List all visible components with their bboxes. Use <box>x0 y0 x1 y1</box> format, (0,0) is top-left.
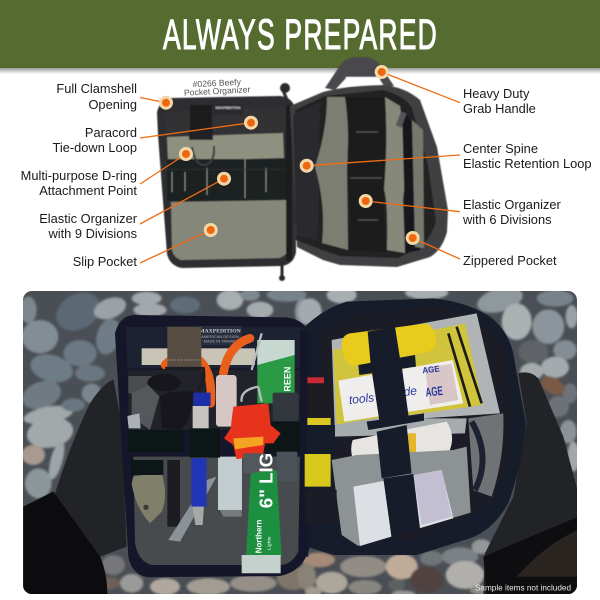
right panel of pouch <box>290 85 448 267</box>
foil lower edge <box>333 418 467 437</box>
left side of pouch with gear <box>115 315 310 577</box>
maxpedition label: MAXPEDITION <box>216 106 241 110</box>
right label: center spine: Center Spine <box>463 141 538 156</box>
elastic straps <box>358 327 424 538</box>
top green label text: REEN <box>283 367 293 392</box>
white bandage box <box>338 360 463 422</box>
right label: grab handle: Grab Handle <box>463 101 536 116</box>
right glove and sleeve <box>483 372 578 597</box>
flap seam <box>293 332 313 547</box>
zippered pocket mesh <box>412 120 424 248</box>
pliers <box>167 460 217 542</box>
elastic organizer band <box>167 159 288 201</box>
flashlight <box>243 393 299 481</box>
paracord knots <box>279 83 290 281</box>
rocks background <box>18 283 579 597</box>
left label: elastic organizer 9: with 9 Divisions <box>47 226 137 241</box>
center spine with spray <box>300 330 337 557</box>
left panel of pouch <box>157 96 296 268</box>
left mesh, dark <box>293 102 320 240</box>
black sheath <box>160 391 193 430</box>
side seam <box>286 105 292 261</box>
left glove and sleeve <box>23 379 127 597</box>
pouch body <box>300 298 526 555</box>
green glow stick packet: Northern <box>255 519 264 553</box>
white bandage box: AGE <box>425 384 444 400</box>
zipper <box>402 112 420 253</box>
model number caption: Pocket Organizer <box>184 84 251 98</box>
white bandage box: tools <box>348 390 375 407</box>
left label: full clamshell opening: Full Clamshell <box>56 81 137 96</box>
blue screwdriver pen <box>191 393 211 525</box>
green packet <box>257 340 295 403</box>
left label: paracord tie-down loop: Tie-down Loop <box>52 140 137 155</box>
left label: multi-purpose d-ring: Multi-purpose D-ring <box>21 168 137 183</box>
product photo: open pouch <box>157 57 448 281</box>
filled pouch photo <box>18 283 579 597</box>
right label: center spine: Elastic Retention Loop <box>463 156 592 171</box>
foil packet <box>332 313 500 437</box>
paracord bundle <box>147 374 181 391</box>
green glow stick packet <box>242 453 282 573</box>
upper khaki panel <box>167 133 284 161</box>
center spine elastic <box>345 97 386 252</box>
green glow stick packet: 6" LIG <box>256 453 277 508</box>
right label: elastic organizer 6: Elastic Organizer <box>463 197 562 212</box>
strap with D-ring <box>189 105 214 165</box>
knife <box>132 385 165 523</box>
left label: slip pocket: Slip Pocket <box>73 254 137 269</box>
whistle <box>224 403 281 459</box>
model number caption: #0266 Beefy <box>192 77 242 89</box>
maxpedition label <box>213 104 243 115</box>
green glow stick packet: Lights <box>267 536 273 550</box>
spray bottle <box>216 375 242 517</box>
title: ALWAYS PREPARED <box>163 11 438 59</box>
maxpedition label: AMERICAN DESIGN <box>201 334 239 339</box>
tan strap <box>165 326 206 380</box>
maxpedition label: MAXPEDITION <box>199 329 242 335</box>
maxpedition label <box>198 326 242 345</box>
left label: multi-purpose d-ring: Attachment Point <box>39 183 137 198</box>
sealed dressings bag <box>332 447 471 546</box>
side zip pocket <box>468 413 503 497</box>
header band <box>0 0 600 74</box>
left label: paracord tie-down loop: Paracord <box>85 125 137 140</box>
right label: elastic organizer 6: with 6 Divisions <box>462 212 552 227</box>
white bandage box: AGE <box>422 364 440 375</box>
orange carabiner <box>165 338 250 403</box>
maxpedition label: MADE IN TAIWAN <box>204 339 236 344</box>
sample disclaimer: Sample items not included <box>475 584 571 592</box>
elastic organizer band <box>128 422 300 475</box>
snap hook <box>242 333 262 402</box>
right label: grab handle: Heavy Duty <box>463 86 530 101</box>
right side of pouch with gear <box>300 298 526 557</box>
mesh pocket left <box>315 97 348 250</box>
callout lines <box>140 72 460 263</box>
left label: full clamshell opening: Opening <box>88 97 137 112</box>
paper card <box>142 348 255 365</box>
yellow emergency blanket <box>333 323 483 425</box>
pouch flap <box>115 315 310 577</box>
yellow cylinder <box>342 323 436 366</box>
rolled gauze <box>351 422 452 456</box>
slip pocket <box>171 200 288 260</box>
small multitool <box>127 413 141 428</box>
grab handle <box>325 57 394 90</box>
right label: zippered pocket: Zippered Pocket <box>463 253 557 268</box>
left label: elastic organizer 9: Elastic Organizer <box>39 211 138 226</box>
white bandage box: de <box>403 384 418 399</box>
mesh pocket right <box>384 97 405 253</box>
callout markers <box>159 65 420 245</box>
